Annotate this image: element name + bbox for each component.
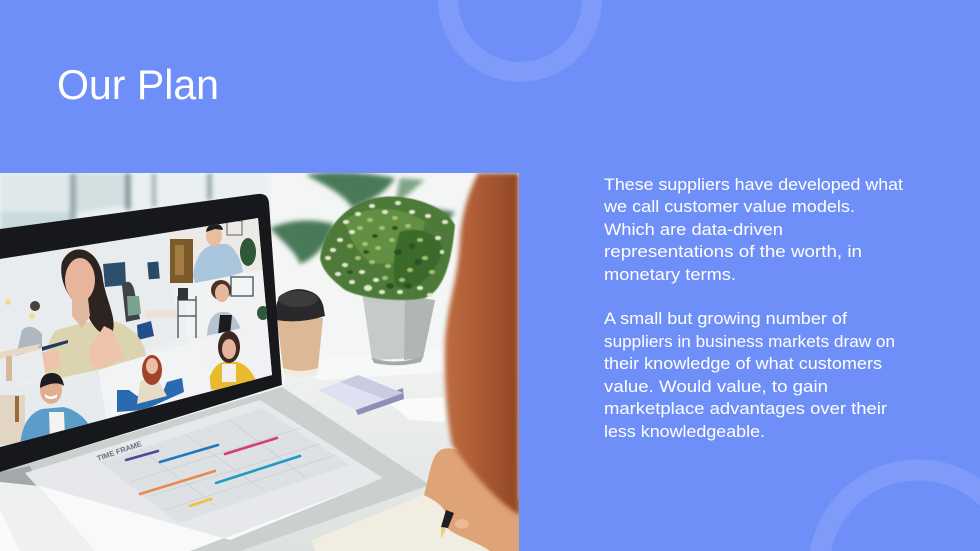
tile: woman presenting (0, 249, 177, 381)
sticky note pad (318, 375, 404, 415)
notebook (312, 495, 500, 551)
laptop screen with video tiles (0, 215, 275, 450)
tile: man in blue shirt (168, 218, 265, 284)
text block: marketplace advantages: suppliers in business markets draw on (604, 332, 895, 351)
text block: marketplace advantages: value. Would value, to gain (604, 377, 828, 396)
text block: customer value models: monetary terms. (604, 265, 736, 284)
paper schedule (25, 400, 383, 551)
laptop lid (0, 194, 282, 472)
text block: customer value models: we call customer value models. (603, 197, 855, 216)
tile: woman in yellow jacket (204, 322, 272, 394)
text block: marketplace advantages: their knowledge of what customers (604, 354, 882, 373)
tile: woman with red hair (98, 355, 212, 419)
photo background (0, 173, 519, 472)
potted plant (320, 197, 455, 365)
text block: customer value models: representations of the worth, in (604, 242, 862, 261)
text block: marketplace advantages: marketplace advantages over their (604, 399, 887, 418)
decorative ring: bottom right (810, 459, 980, 551)
text block: marketplace advantages: less knowledgeable. (604, 422, 765, 441)
paper schedule: TIME FRAME (96, 439, 143, 463)
schedule grid (130, 420, 335, 510)
text block: marketplace advantages: A small but growing number of (604, 309, 847, 328)
text block: marketplace advantages (604, 309, 895, 441)
text block: customer value models: These suppliers have developed what (604, 175, 903, 194)
text block: customer value models: Which are data-driven (604, 220, 783, 239)
background monstera plant (270, 172, 455, 264)
coffee cup (276, 289, 325, 378)
laptop base (0, 387, 430, 551)
desk (240, 405, 453, 551)
hand with pen (424, 448, 519, 551)
text block: customer value models (603, 175, 903, 284)
schedule bars (126, 438, 300, 506)
tile: man in denim shirt (0, 370, 108, 447)
photo: video call on a laptop (0, 172, 519, 551)
title: Our Plan (57, 61, 219, 108)
tile: woman with short hair (178, 270, 270, 338)
decorative ring: top (438, 0, 602, 82)
hair (445, 173, 519, 515)
